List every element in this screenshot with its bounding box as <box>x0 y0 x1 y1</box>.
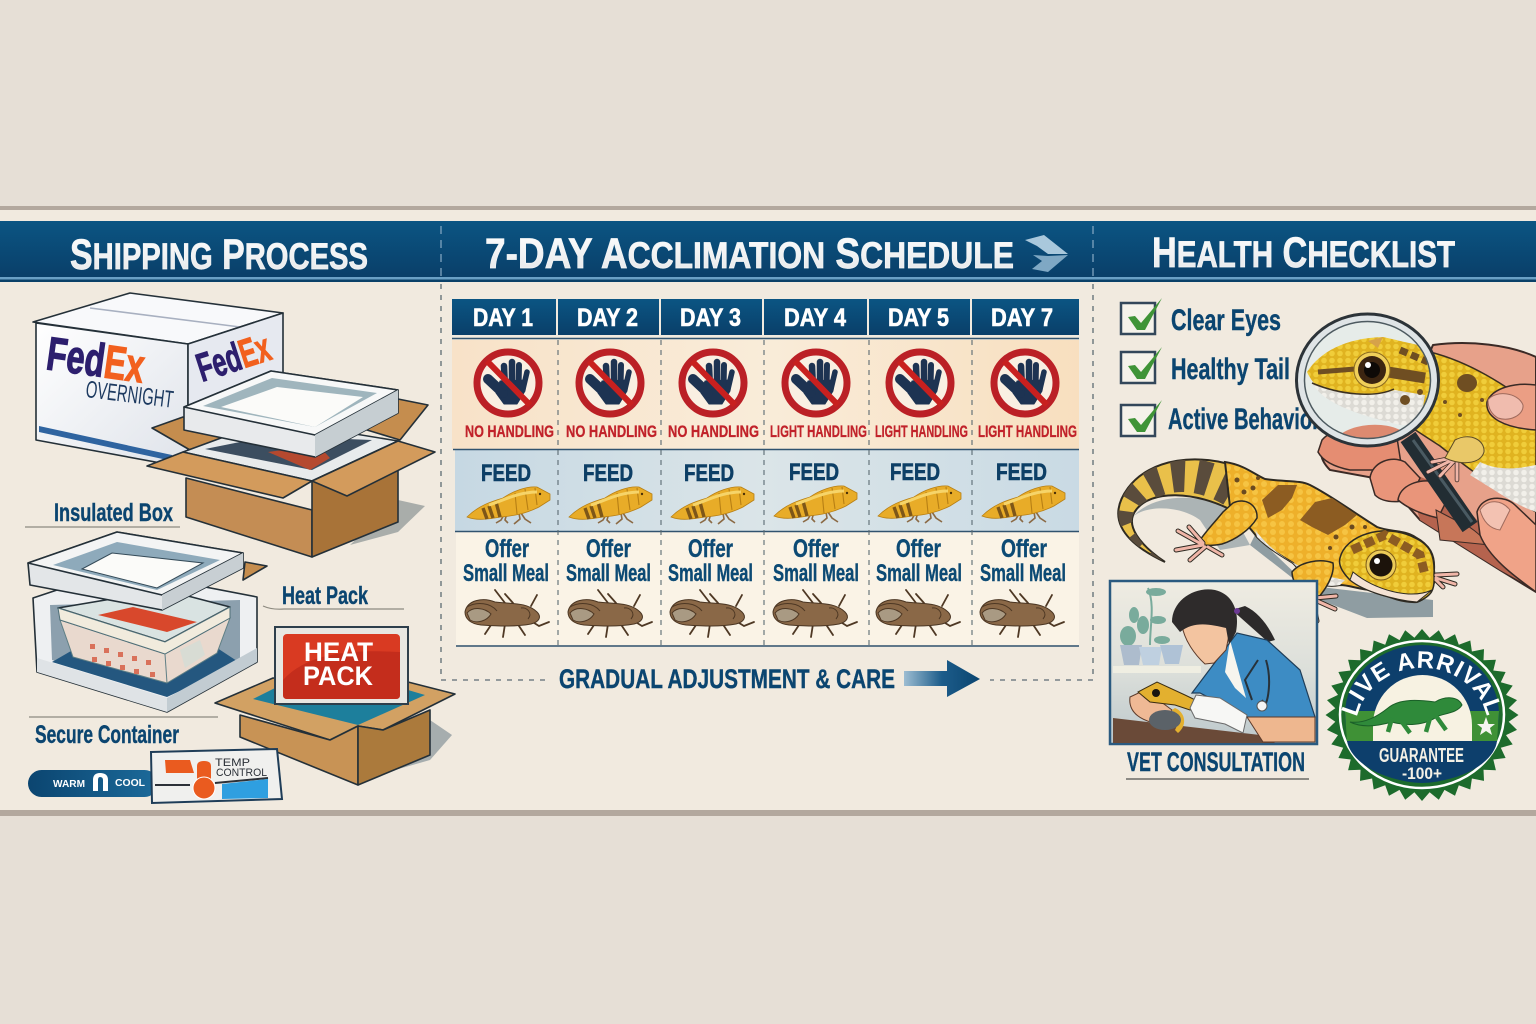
text: overnight: OVERNIGHT <box>84 376 175 414</box>
panel: 7-day schedule table <box>452 299 1079 646</box>
infographic canvas <box>0 206 1536 816</box>
column: day 2: FEED <box>583 460 633 487</box>
column: day 7: Small Meal <box>980 560 1066 587</box>
column: day 4 <box>764 299 867 637</box>
title: 7-day acclimation schedule: 7-DAY ACCLIMATION SCHEDULE <box>485 230 1014 278</box>
text: guarantee: GUARANTEE <box>1379 745 1464 767</box>
column: day 5 <box>869 299 970 637</box>
checklist item: active behavior <box>1121 400 1320 436</box>
label: heat pack: Heat Pack <box>282 582 368 610</box>
column: day 5: Offer <box>896 535 941 563</box>
caption: gradual adjustment and care: GRADUAL ADJUSTMENT & CARE <box>559 664 895 694</box>
badge: live arrival guarantee <box>1326 629 1518 801</box>
icon: green gecko <box>1350 698 1462 733</box>
column: day 4: FEED <box>789 459 839 486</box>
text: live arrival: LIVE ARRIVAL <box>1342 651 1500 716</box>
column: day 3: NO HANDLING <box>668 422 759 441</box>
column: day 4: DAY 4 <box>784 304 846 332</box>
arrow: progress <box>904 660 980 697</box>
illustration: open cardboard box with foam lid <box>147 371 435 557</box>
illustration: heat pack in box <box>215 627 455 785</box>
column: day 2: DAY 2 <box>577 304 638 332</box>
text: 100: -100+ <box>1402 764 1442 783</box>
logo: FedEx front: FedEx <box>44 326 148 393</box>
label: insulated box: Insulated Box <box>54 499 173 527</box>
illustration: FedEx overnight box <box>33 293 283 468</box>
card: temp control: CONTROL <box>216 767 267 779</box>
logo: FedEx side: FedEx <box>191 326 276 391</box>
column: day 1: DAY 1 <box>473 304 533 332</box>
column: day 7 <box>972 299 1079 637</box>
column: day 1 <box>452 299 556 637</box>
column: day 1: FEED <box>481 460 531 487</box>
checklist item: healthy tail: Healthy Tail <box>1171 353 1290 386</box>
column: day 5: FEED <box>890 459 940 486</box>
illustration: vet consultation scene <box>1110 581 1317 744</box>
column: day 1: Small Meal <box>463 560 549 587</box>
column: day 1: NO HANDLING <box>465 422 554 441</box>
control: warm cool slider <box>28 770 158 797</box>
column: day 1: Offer <box>485 535 529 563</box>
checklist item: healthy tail <box>1121 347 1290 386</box>
icon: schedule chevron arrow <box>1025 235 1068 272</box>
column: day 4: Small Meal <box>773 560 859 587</box>
control: warm cool slider: COOL <box>115 778 145 789</box>
illustration: hand holding gecko <box>1318 343 1536 592</box>
panel: health checklist <box>1108 298 1536 801</box>
column: day 2 <box>558 299 659 637</box>
title: shipping process: SHIPPING PROCESS <box>70 231 368 279</box>
illustration: held gecko front leg <box>1428 437 1484 480</box>
column: day 4: LIGHT HANDLING <box>770 422 867 441</box>
text: heat pack: HEAT <box>304 637 373 667</box>
column: day 5: LIGHT HANDLING <box>875 422 968 441</box>
column: day 7: FEED <box>996 459 1047 486</box>
panel: shipping process <box>25 293 455 803</box>
column: day 5: DAY 5 <box>888 304 949 332</box>
label: vet consultation: VET CONSULTATION <box>1127 747 1305 777</box>
title: health checklist: HEALTH CHECKLIST <box>1152 229 1455 277</box>
column: day 3: DAY 3 <box>680 304 741 332</box>
illustration: secure foam container <box>28 532 267 712</box>
card: temp control <box>151 749 282 803</box>
column: day 4: Offer <box>793 535 839 563</box>
column: day 3: FEED <box>684 460 734 487</box>
checklist item: clear eyes: Clear Eyes <box>1171 304 1281 337</box>
header band <box>0 221 1536 282</box>
column: day 7: LIGHT HANDLING <box>978 422 1077 441</box>
column: day 2: NO HANDLING <box>566 422 657 441</box>
column: day 2: Offer <box>586 535 631 563</box>
icon: magnifying glass with gecko <box>1296 314 1472 527</box>
column: day 3: Offer <box>688 535 733 563</box>
column: day 2: Small Meal <box>566 560 651 587</box>
illustration: heat pack in box: PACK <box>303 661 373 691</box>
card: temp control: TEMP <box>215 757 250 769</box>
illustration: leopard gecko <box>1118 459 1457 621</box>
column: day 3: Small Meal <box>668 560 753 587</box>
checklist item: clear eyes <box>1121 298 1281 337</box>
icon: star <box>1477 717 1495 735</box>
column: day 3 <box>661 299 762 637</box>
control: warm cool slider: WARM <box>53 779 85 790</box>
column: day 5: Small Meal <box>876 560 962 587</box>
column: day 7: Offer <box>1001 535 1047 563</box>
label: secure container: Secure Container <box>35 721 179 749</box>
column: day 7: DAY 7 <box>991 304 1053 332</box>
checklist item: active behavior: Active Behavior <box>1168 403 1320 436</box>
